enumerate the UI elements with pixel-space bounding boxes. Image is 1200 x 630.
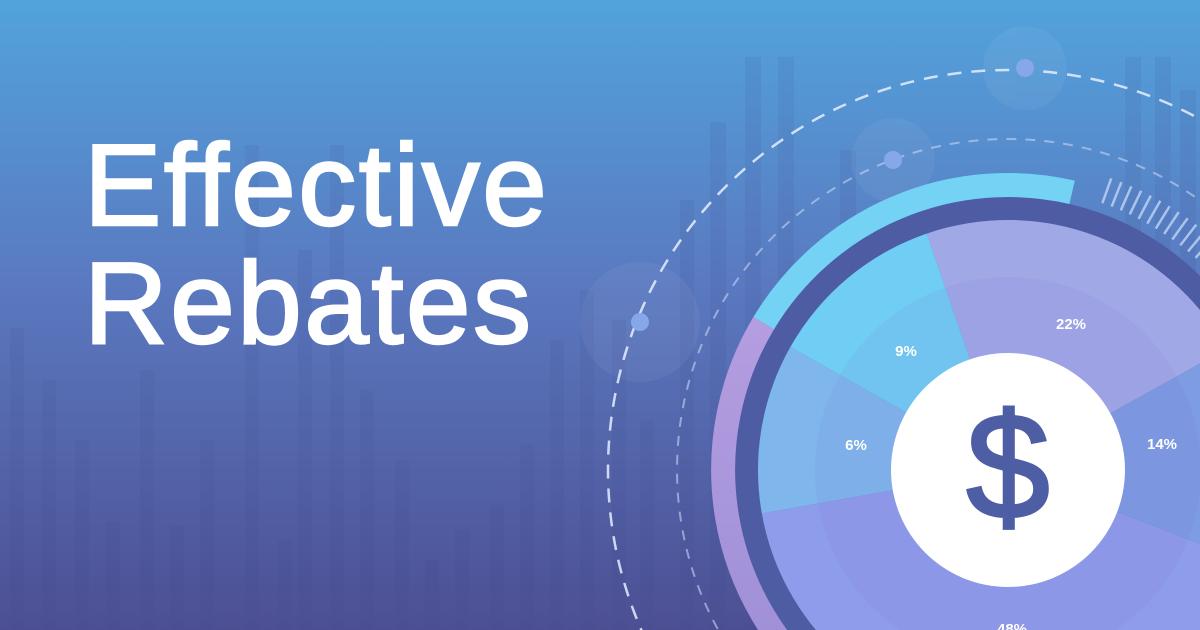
pie labels: [845, 316, 1177, 630]
title: Effective: [84, 120, 549, 250]
cyan progress arc: [764, 185, 1072, 323]
pie labels: 6%: [845, 437, 867, 454]
pie labels: 9%: [895, 343, 917, 360]
center dollar badge: $: [966, 382, 1050, 550]
purple arc: [711, 317, 787, 630]
background bars: [745, 57, 1196, 94]
center dollar badge: [891, 353, 1125, 587]
title: [84, 120, 549, 368]
hatch ticks: [1101, 178, 1200, 259]
orbit dots: [631, 59, 1034, 331]
title: Rebates: [84, 238, 534, 368]
pie labels: 22%: [1056, 316, 1086, 333]
dashed orbit circles: [608, 70, 1200, 630]
pie chart: [758, 220, 1200, 630]
dark ring: [747, 209, 1200, 630]
pie labels: 14%: [1147, 436, 1177, 453]
faint halo circles: [890, 27, 1016, 128]
